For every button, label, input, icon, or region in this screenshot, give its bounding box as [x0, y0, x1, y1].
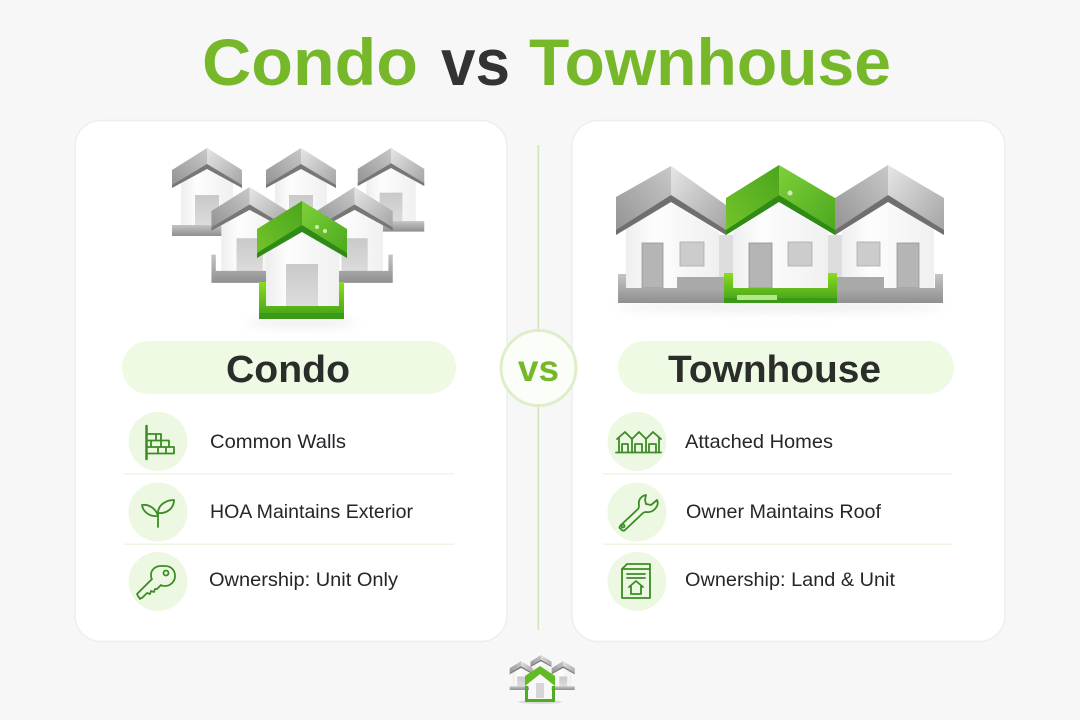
row: attached homes: Attached Homes: [685, 431, 833, 453]
illustration: condo cluster of houses: [172, 148, 424, 327]
panel: condo: [75, 120, 507, 642]
icon: green highlighted house: [257, 201, 347, 319]
title: vs: [441, 25, 510, 99]
row: common walls: [128, 412, 346, 471]
heading pill: Townhouse: Townhouse: [668, 349, 881, 391]
icon: deed document: [622, 564, 650, 598]
vs badge: vs: [518, 348, 559, 389]
row: ownership land and unit: [608, 552, 896, 611]
icon: right grey townhouse: [828, 165, 944, 303]
title: Condo: [202, 25, 418, 99]
panel: townhouse: [572, 120, 1005, 642]
row: owner maintains roof: Owner Maintains Roof: [686, 501, 882, 523]
center divider line: [538, 145, 539, 630]
icon: footer logo houses: [510, 655, 575, 704]
icon: plant sprout: [142, 500, 174, 527]
heading pill: Townhouse: [618, 341, 954, 394]
icon: attached homes: [616, 432, 661, 452]
title: [202, 25, 891, 99]
icon: green highlighted townhouse: [724, 165, 837, 303]
icon: key: [137, 566, 175, 599]
row: ownership unit only: Ownership: Unit Only: [209, 569, 398, 591]
vs badge: [501, 330, 576, 406]
icon: wrench: [620, 495, 658, 531]
title: Townhouse: [529, 25, 891, 99]
row: HOA maintains exterior: [128, 482, 414, 542]
row: HOA maintains exterior: HOA Maintains Exterior: [210, 501, 414, 523]
heading pill: Condo: [122, 341, 456, 394]
row: owner maintains roof: [608, 482, 882, 542]
icon: brick wall: [146, 426, 174, 459]
row: ownership land and unit: Ownership: Land & Unit: [685, 569, 896, 591]
row: ownership unit only: [128, 552, 398, 611]
icon: left grey townhouse: [616, 166, 733, 303]
illustration: row of townhouses: [615, 165, 945, 311]
row: common walls: Common Walls: [210, 431, 346, 453]
heading pill: Condo: Condo: [226, 349, 350, 391]
row: attached homes: [608, 412, 833, 471]
